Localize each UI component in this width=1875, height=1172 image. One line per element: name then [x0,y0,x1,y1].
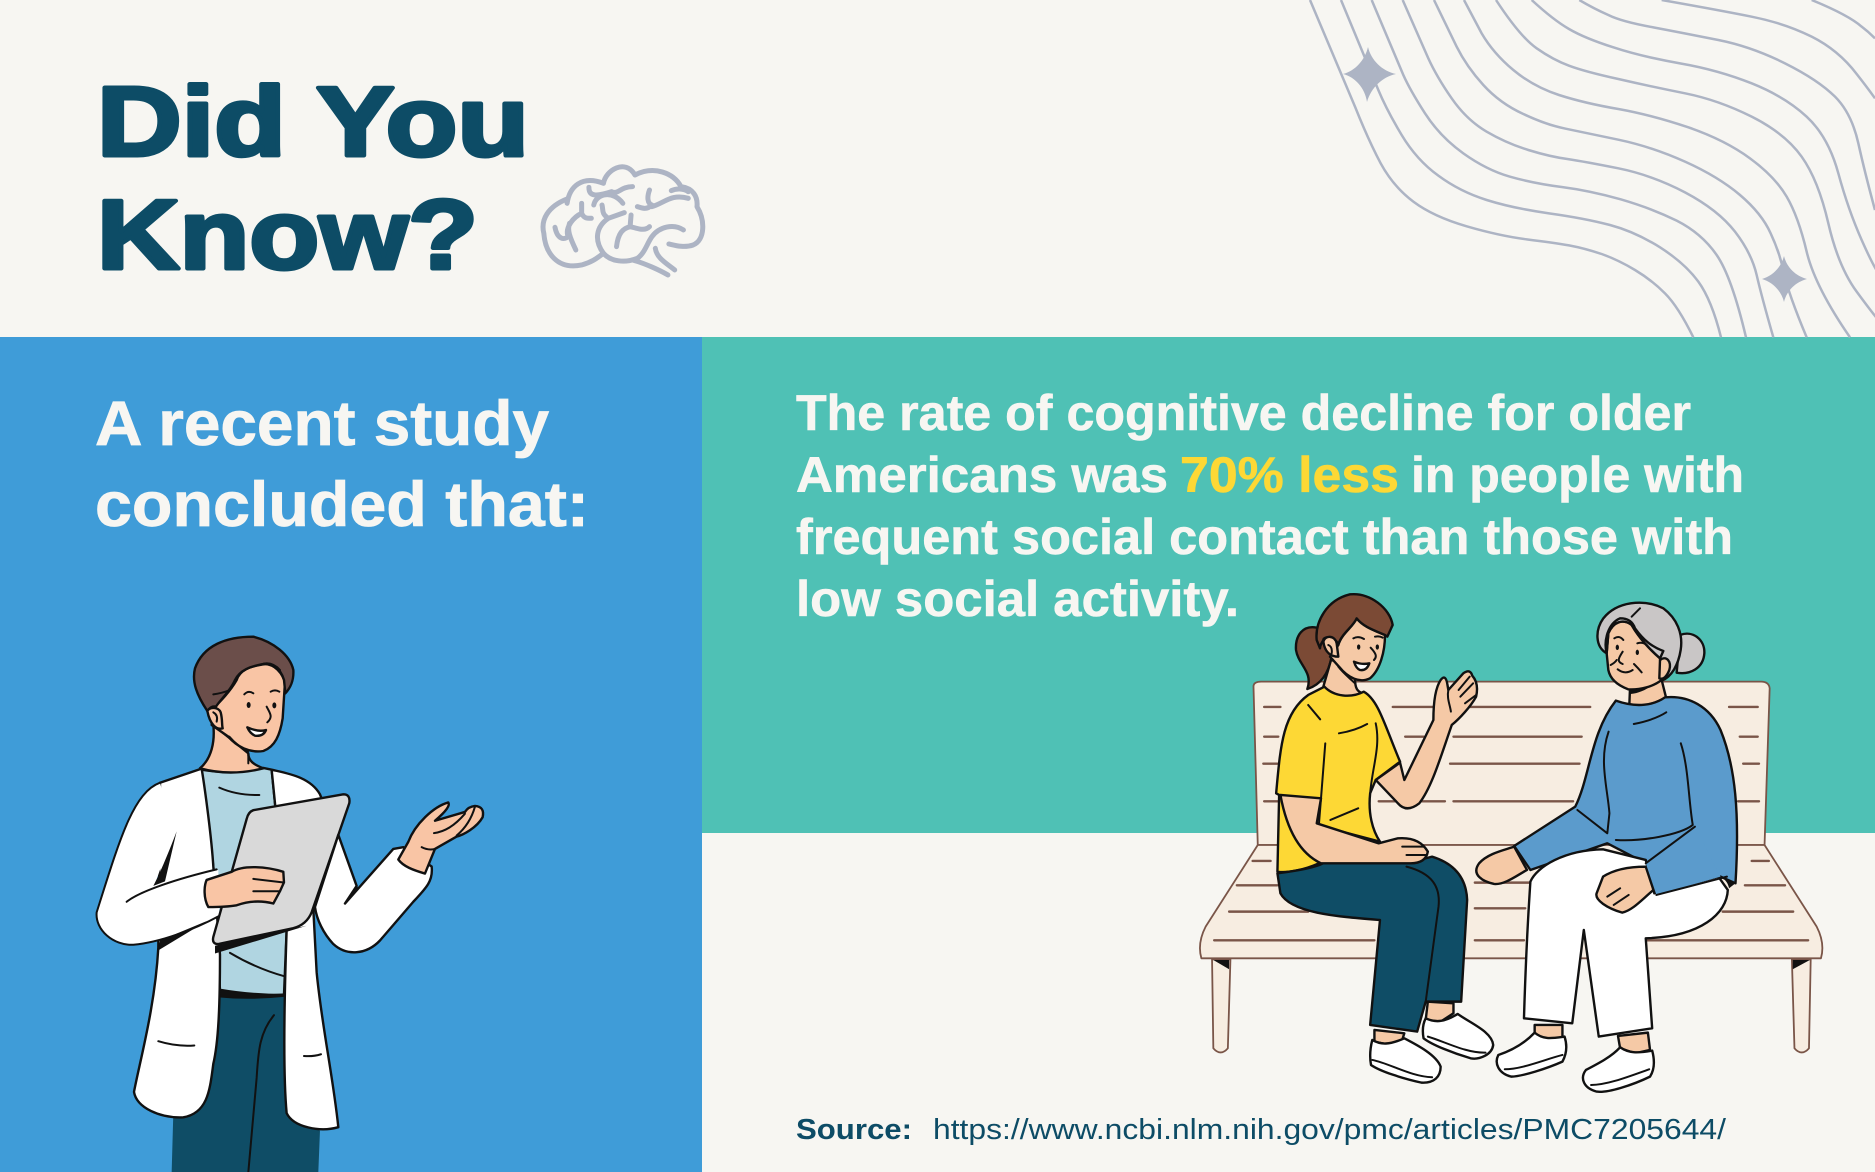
text block: study finding [796,385,1744,627]
bench [1200,682,1822,1052]
older woman head [1597,603,1704,706]
icon: sparkle bottom [1762,256,1807,302]
doctor head [194,637,293,772]
panel: blue study panel [0,337,702,1172]
younger woman head [1296,594,1393,696]
younger woman in yellow shirt [1276,671,1493,1083]
panel: teal finding panel [702,337,1875,833]
older woman in blue sweater [1476,697,1737,1092]
text block: study finding: The rate of cognitive decline for older [796,385,1691,441]
decorative wavy lines with sparkles [1310,0,1875,337]
illustration: doctor with tablet [97,637,483,1172]
illustration: two women on a bench [1200,594,1822,1092]
source citation: https://www.ncbi.nlm.nih.gov/pmc/articles/PMC7205644/ [933,1114,1727,1146]
icon: sparkle top [1343,47,1396,102]
heading: a recent study: concluded that: [95,470,589,540]
heading: a recent study: A recent study [95,389,549,459]
text block: study finding: Americans was [796,447,1168,503]
title [97,66,529,290]
title: Know? [97,180,478,290]
text block: study finding: in people with [1411,447,1744,503]
text block: study finding: low social activity. [796,571,1239,627]
source citation: Source: [796,1114,912,1146]
text block: study finding: frequent social contact than those with [796,509,1733,565]
text block: study finding: 70% less [1180,447,1399,503]
icon: brain [543,167,703,275]
title: Did You [97,66,529,176]
heading: a recent study [95,389,589,540]
